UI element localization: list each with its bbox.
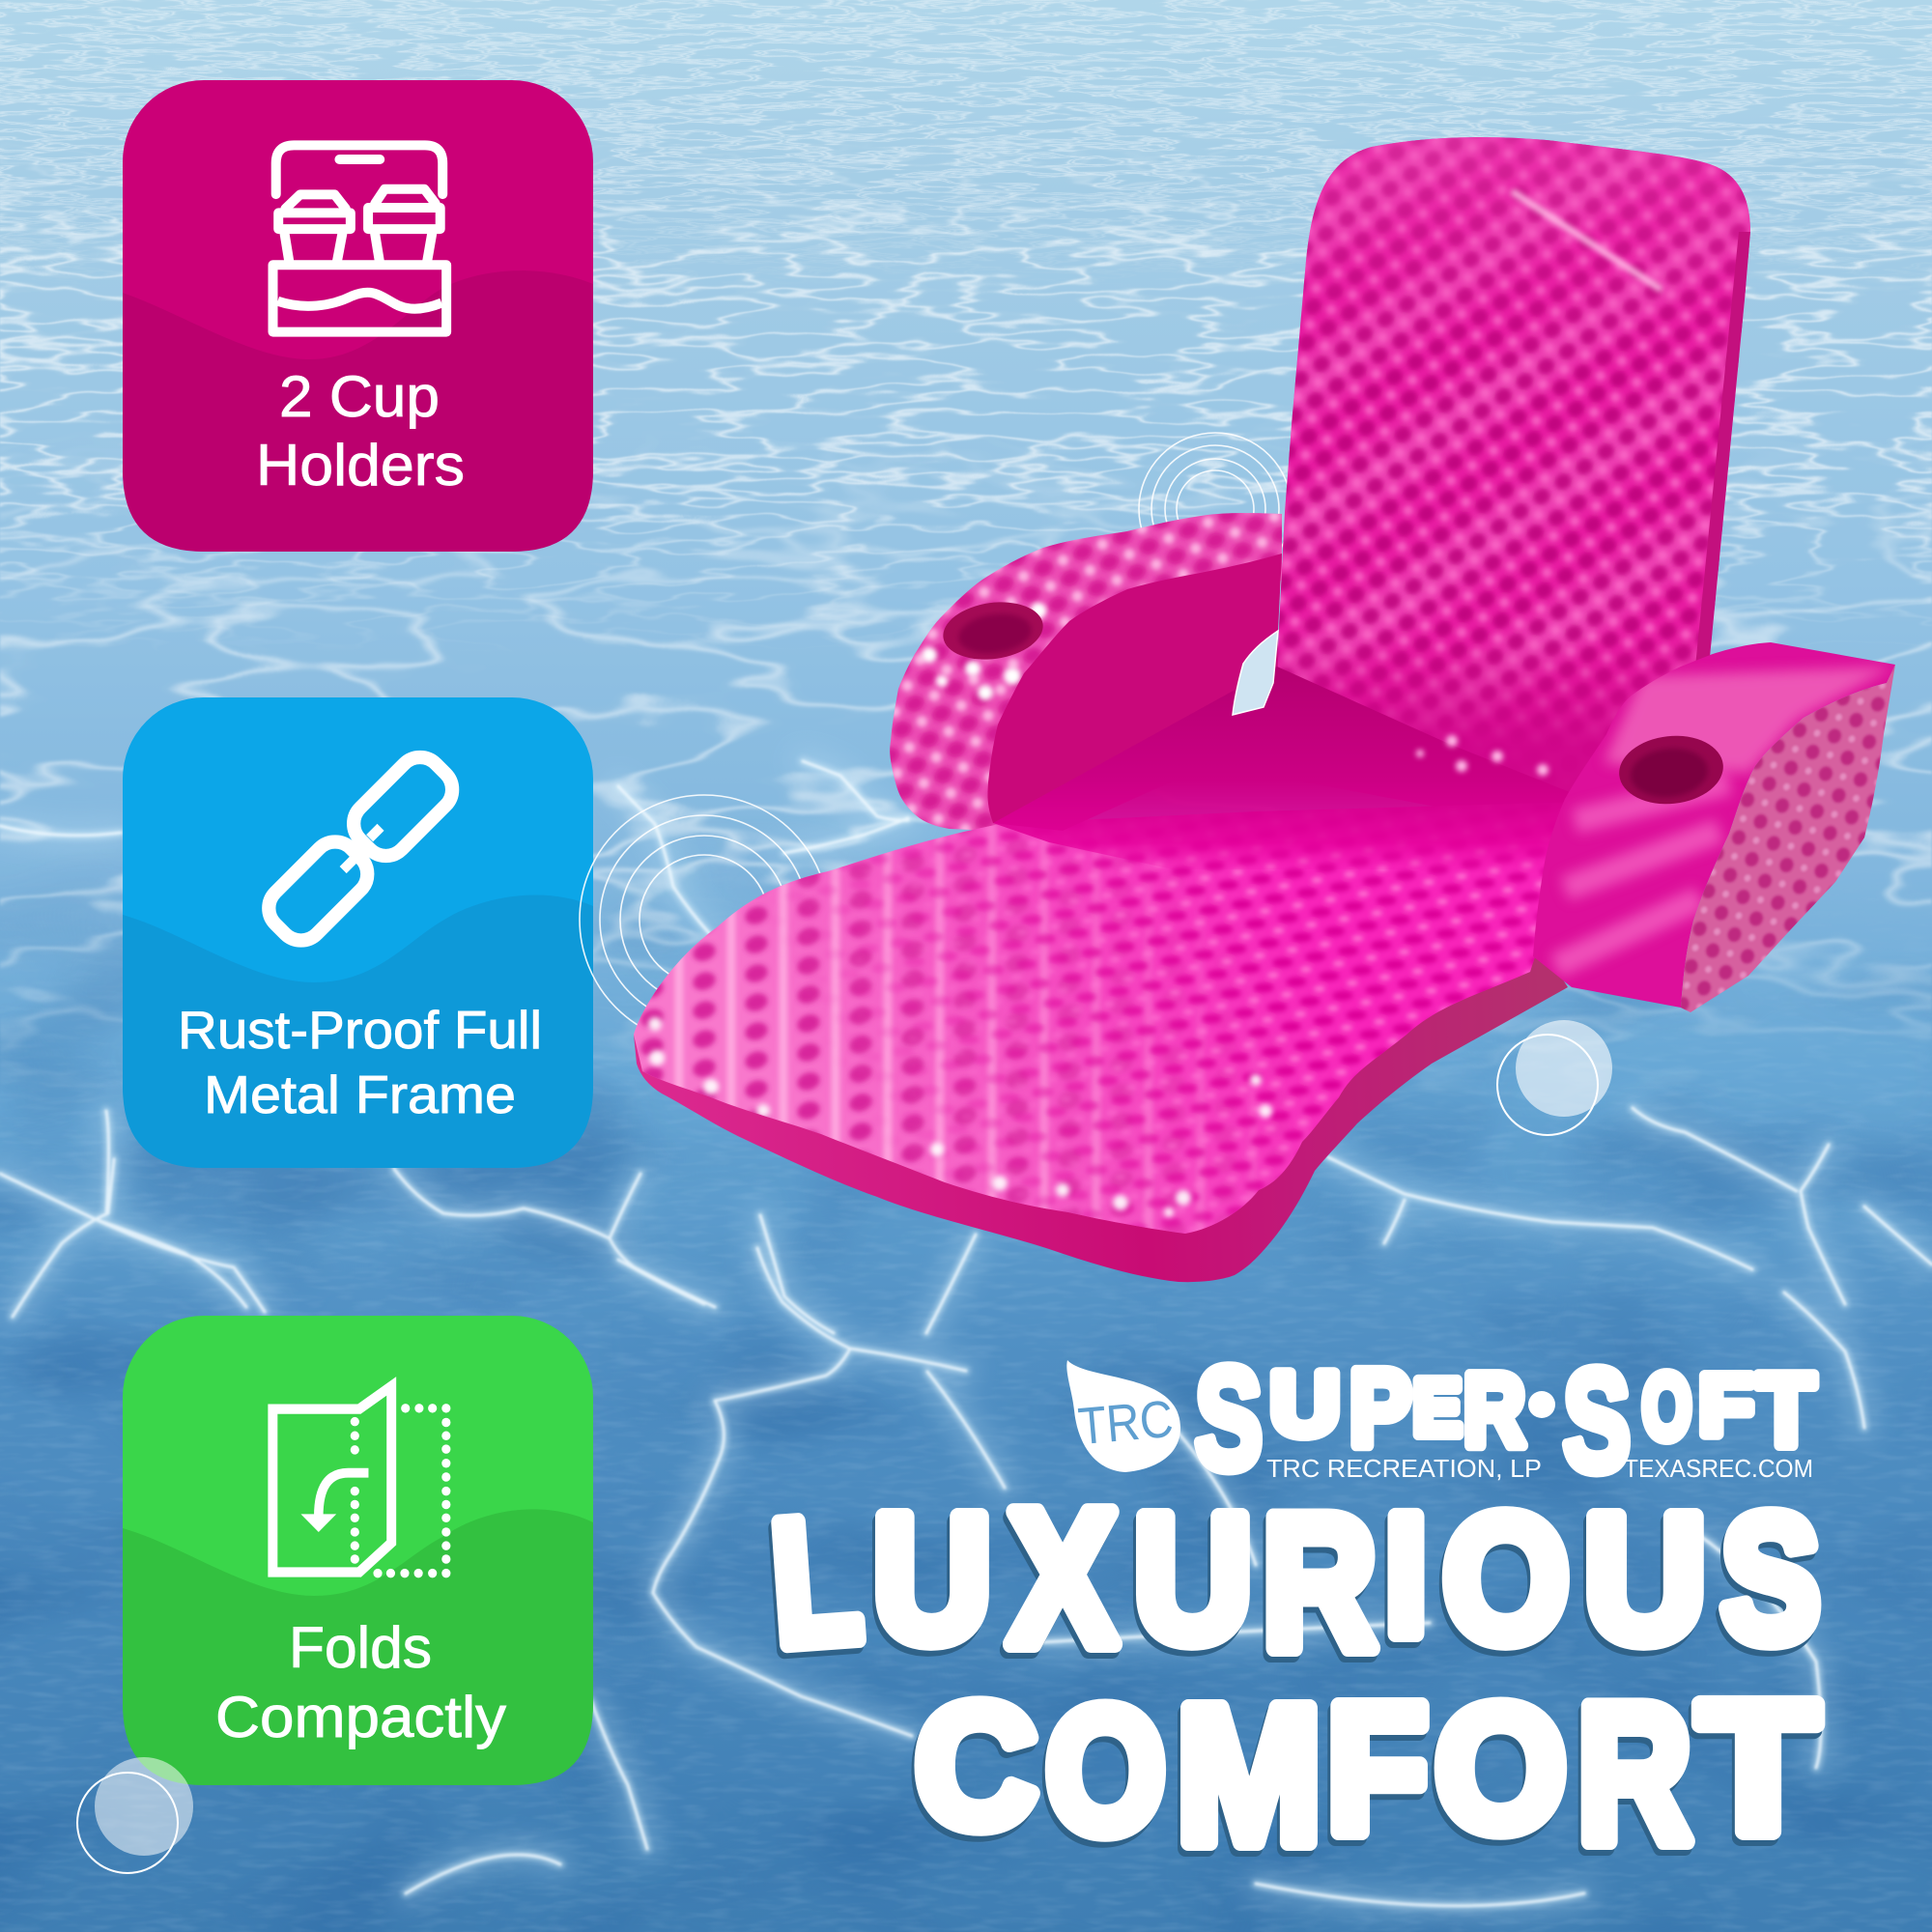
right cup hole [1616,731,1726,809]
chair rear seat shadow [993,667,1570,918]
headline line 1: O [1443,1479,1569,1679]
headline line 1: S [1721,1479,1820,1679]
chair seat mat [618,802,1594,1282]
brand wordmark [1195,1337,1815,1501]
panel: cup holders [123,80,593,552]
brand wordmark: O [1642,1355,1691,1459]
logo: TRC Super-Soft [1066,1337,1815,1501]
headline line 2: M [1177,1665,1321,1884]
bubble: under seat [1497,1020,1612,1135]
logo subline left: TRC RECREATION, LP [1266,1454,1542,1483]
headline line 1: U [1584,1479,1706,1679]
headline line 2 [916,1663,1818,1884]
brand wordmark: T [1757,1353,1815,1467]
headline line 2: R [1577,1664,1691,1884]
headline line 2: T [1698,1663,1818,1871]
headline line 1: U [1134,1479,1252,1679]
label: Rust-Proof Full Metal Frame: Rust-Proof Full [178,1000,542,1060]
ripple rings by the seat [580,433,1292,1044]
left cup hole [939,596,1047,666]
icon: drink carrier with two cups [272,145,446,332]
badge text: TRC [1076,1390,1176,1456]
chair right arm [1533,642,1903,1019]
logo badge [1066,1360,1180,1472]
headline line 1: U [873,1479,991,1679]
brand wordmark: E [1413,1364,1462,1452]
chair left arm [890,513,1282,830]
headline line 1 [766,1471,1820,1689]
water gap behind arm [1233,631,1278,715]
label: Rust-Proof Full Metal Frame: Metal Frame [204,1065,516,1124]
icon: folding page [272,1386,450,1577]
chair inner arm panel [988,554,1282,831]
brand wordmark: S [1195,1337,1263,1499]
headline line 1: L [766,1479,867,1683]
headline line 2: F [1327,1667,1428,1871]
label: Folds Compactly: Compactly [215,1685,506,1749]
headline line 2: O [1046,1670,1165,1869]
headline line 2: O [1435,1668,1566,1867]
headline line 1: I [1385,1481,1427,1670]
brand wordmark: U [1270,1353,1340,1454]
chair seat highlights near backrest [1416,735,1548,776]
headline line 1: R [1263,1476,1377,1689]
headline: LUXURIOUS COMFORT [766,1471,1820,1884]
label: 2 Cup Holders: 2 Cup [279,364,440,429]
product: pink foam floating chair [618,126,1903,1282]
icon: chain links [260,748,462,950]
chair backrest [1277,137,1750,806]
brand wordmark: F [1699,1357,1753,1453]
headline line 2: C [916,1669,1037,1863]
brand wordmark: P [1350,1348,1411,1468]
brand wordmark: R [1463,1353,1525,1467]
headline line 1: X [1009,1471,1117,1686]
bubble: bottom left [77,1757,193,1873]
logo subline right: TEXASREC.COM [1624,1454,1813,1483]
label: Folds Compactly: Folds [289,1615,432,1680]
panel: folds compactly [123,1316,593,1785]
panel: rust-proof frame [123,697,593,1168]
label: 2 Cup Holders: Holders [256,433,465,497]
brand wordmark: S [1563,1339,1631,1501]
